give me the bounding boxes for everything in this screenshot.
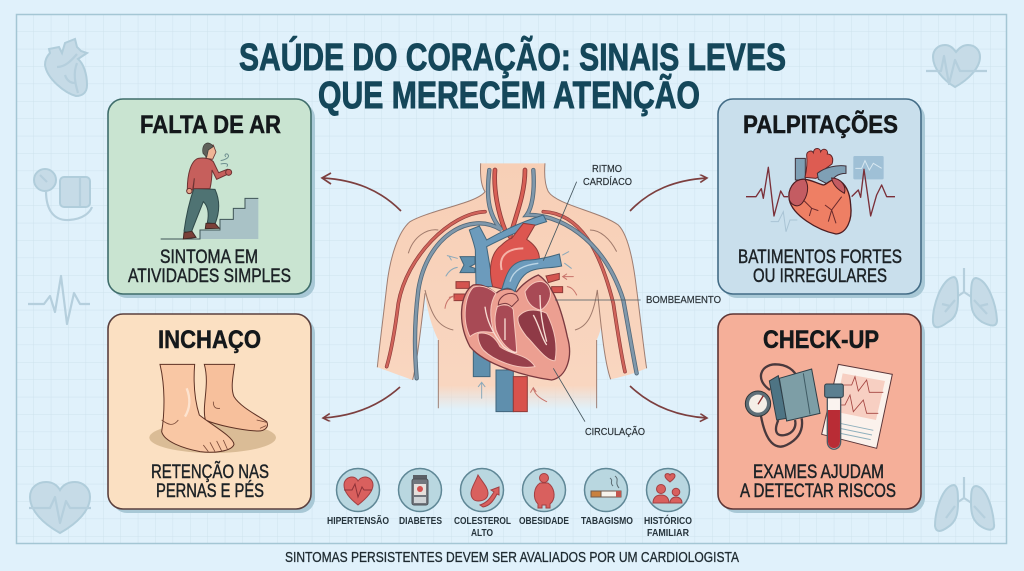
risk factor: colesterol alto: COLESTEROL xyxy=(454,515,511,527)
flow arrows xyxy=(445,252,577,402)
text: falta de ar xyxy=(128,247,291,287)
risk factor: tabagismo: TABAGISMO xyxy=(581,515,633,527)
label: circulação: CIRCULAÇÃO xyxy=(585,425,645,438)
superior vena cava xyxy=(469,215,547,287)
arrow: to palpitações xyxy=(630,178,707,211)
label: ritmo cardíaco xyxy=(583,163,632,188)
leader lines xyxy=(543,182,641,422)
small side vessels xyxy=(454,273,563,301)
arrow: to inchaço xyxy=(323,387,400,418)
icon: swollen feet xyxy=(149,364,276,453)
background icon: lungs xyxy=(933,268,997,327)
risk factor: obesidade: OBESIDADE xyxy=(519,515,569,527)
background icon: heart with pulse xyxy=(29,482,91,533)
risk factor: histórico familiar xyxy=(644,468,692,539)
risk factor: diabetes: DIABETES xyxy=(399,515,442,527)
heading: falta de ar: FALTA DE AR xyxy=(140,111,281,139)
text: check-up: A DETECTAR RISCOS xyxy=(740,481,896,502)
aorta xyxy=(490,223,539,290)
title xyxy=(239,35,786,117)
central anatomy illustration xyxy=(377,163,647,422)
background icon: heart with pulse top right xyxy=(926,45,987,87)
text: inchaço: RETENÇÃO NAS xyxy=(151,461,269,483)
label: bombeamento: BOMBEAMENTO xyxy=(646,294,721,306)
risk factor: colesterol alto xyxy=(454,468,511,539)
background icon: lungs lower xyxy=(935,477,994,531)
torso xyxy=(377,163,647,410)
heart body xyxy=(462,275,570,380)
risk factor: obesidade xyxy=(519,468,569,527)
text: palpitações: OU IRREGULARES xyxy=(753,266,887,287)
background icon: anatomical heart xyxy=(45,39,87,96)
label: ritmo cardíaco: CARDÍACO xyxy=(583,175,632,188)
risk factor: tabagismo xyxy=(581,468,633,527)
icon: heart with ecg xyxy=(746,149,895,234)
panel: palpitações xyxy=(718,99,925,298)
risk factor: diabetes xyxy=(398,468,442,527)
text: palpitações: BATIMENTOS FORTES xyxy=(738,247,902,268)
heading: check-up: CHECK-UP xyxy=(763,326,879,354)
arrowhead: to falta de ar xyxy=(322,173,331,184)
label: ritmo cardíaco: RITMO xyxy=(592,163,622,175)
icon: person climbing stairs xyxy=(161,143,258,239)
text: inchaço: PERNAS E PÉS xyxy=(156,481,264,502)
background icon: pulse line xyxy=(28,276,90,324)
risk factor: hipertensão: HIPERTENSÃO xyxy=(327,514,389,527)
risk factor: histórico familiar: HISTÓRICO xyxy=(644,514,692,527)
background icon: blood pressure cuff xyxy=(34,169,92,220)
arrow: to falta de ar xyxy=(323,178,401,211)
panel: falta de ar xyxy=(108,99,315,298)
panel: check-up xyxy=(718,314,925,513)
arrow: to check-up xyxy=(630,386,707,418)
text: falta de ar: ATIVIDADES SIMPLES xyxy=(128,266,291,287)
text: check-up xyxy=(740,462,896,502)
text: falta de ar: SINTOMA EM xyxy=(160,247,258,268)
title: QUE MERECEM ATENÇÃO xyxy=(318,73,700,117)
risk factor: colesterol alto: ALTO xyxy=(471,527,493,539)
pulmonary artery xyxy=(502,254,562,292)
footer note: SINTOMAS PERSISTENTES DEVEM SER AVALIADOS POR UM CARDIOLOGISTA xyxy=(285,550,739,566)
text: palpitações xyxy=(738,247,902,287)
descending vessels xyxy=(496,370,513,412)
title: SAÚDE DO CORAÇÃO: SINAIS LEVES xyxy=(239,35,786,79)
text: check-up: EXAMES AJUDAM xyxy=(753,462,884,483)
heading: inchaço: INCHAÇO xyxy=(158,326,261,354)
risk factor: hipertensão xyxy=(327,468,389,527)
text: inchaço xyxy=(151,461,269,502)
arteries and veins xyxy=(387,170,637,378)
risk factor: histórico familiar: FAMILIAR xyxy=(647,527,689,539)
icon: blood pressure kit, tube and ecg sheet xyxy=(745,364,892,449)
heading: palpitações: PALPITAÇÕES xyxy=(743,109,898,139)
panel: inchaço xyxy=(108,314,315,513)
